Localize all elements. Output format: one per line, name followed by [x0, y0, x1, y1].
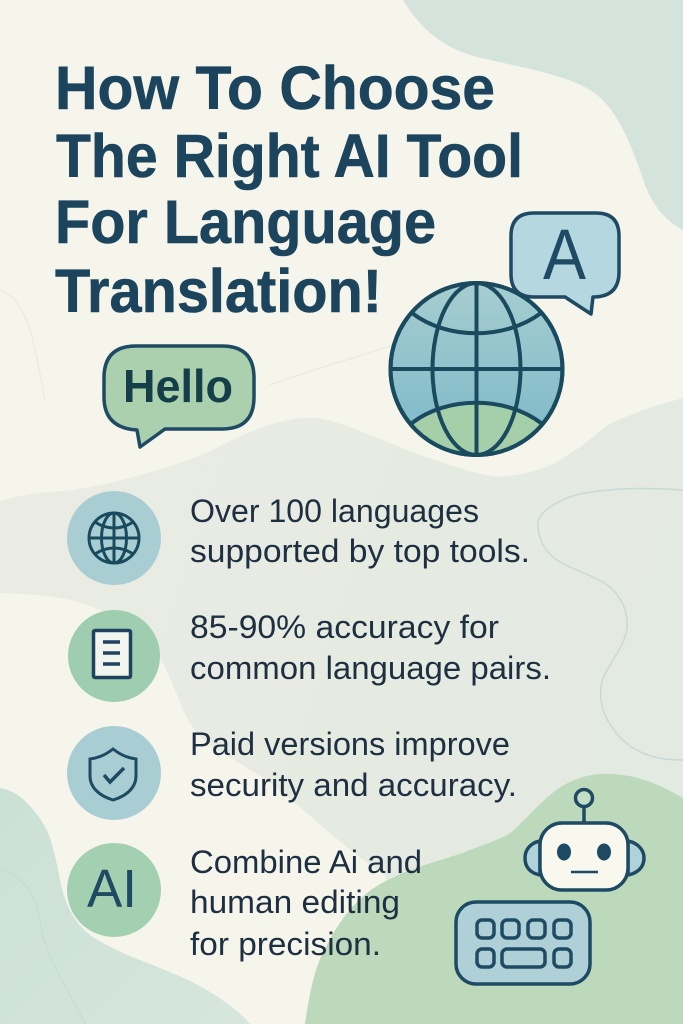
icon: globe: [390, 283, 562, 455]
icon: robot: [525, 790, 644, 890]
text: accuracy: 85-90% accuracy for: [190, 609, 499, 645]
title: [55, 54, 523, 325]
speech bubble: A: A: [543, 216, 587, 295]
text: languages: Over 100 languages: [190, 493, 479, 529]
text: human editing: human editing: [190, 884, 400, 920]
icon: AI badge: [67, 843, 161, 937]
speech bubble: Hello: Hello: [123, 360, 233, 412]
title: How To Choose: [55, 54, 495, 122]
title: For Language: [55, 188, 436, 256]
text: languages: [190, 493, 530, 569]
text: security: security and accuracy.: [190, 767, 517, 803]
text: human editing: [190, 844, 422, 962]
icon: AI badge: AI: [87, 859, 137, 919]
speech bubble: A: [511, 213, 619, 314]
icon: shield badge: [67, 726, 161, 820]
speech bubble: Hello: [104, 346, 254, 447]
text: security: [190, 726, 517, 803]
text: accuracy: [190, 609, 551, 686]
text: languages: supported by top tools.: [190, 533, 530, 569]
icon: small globe badge: [67, 491, 161, 585]
text: human editing: for precision.: [190, 926, 381, 962]
icon: keyboard: [456, 902, 590, 984]
text: human editing: Combine Ai and: [190, 844, 422, 880]
title: The Right AI Tool: [56, 122, 523, 190]
text: security: Paid versions improve: [190, 726, 510, 762]
icon: document badge: [68, 610, 160, 702]
text: accuracy: common language pairs.: [190, 650, 551, 686]
title: Translation!: [55, 257, 382, 325]
